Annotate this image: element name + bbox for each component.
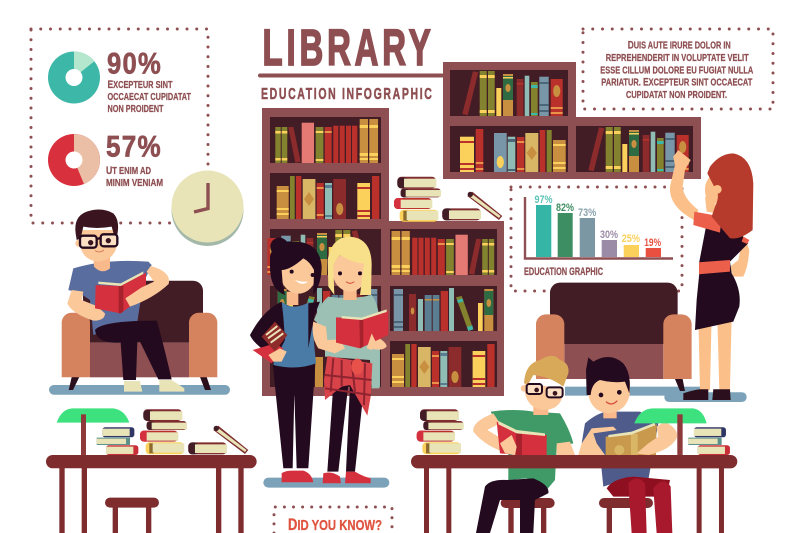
people: two boys reading at desk [411, 356, 737, 533]
stat: 57% text: MINIM VENIAM [106, 178, 163, 189]
dotted box: stats [31, 29, 208, 223]
woman with dark hair [250, 238, 322, 482]
person: woman with red hair reaching for book [664, 150, 753, 402]
book stacks: left desk [97, 409, 248, 455]
stat: 90% text: EXCEPTEUR SINT [108, 79, 172, 91]
dotted box: bar chart [511, 187, 682, 291]
donut chart: 90% [48, 52, 100, 104]
bar chart [524, 194, 673, 278]
bar chart: 19% [644, 237, 661, 249]
icon: desk lamp [634, 408, 707, 455]
woman with blonde hair [313, 237, 388, 483]
armchair: left [49, 281, 230, 395]
paragraph text: CUPIDATAT NON PROIDENT. [626, 90, 727, 101]
bar chart: 30% [600, 229, 618, 241]
stat: 57% text: UT ENIM AD [106, 165, 151, 177]
title: LIBRARY [262, 19, 434, 76]
boy with glasses [473, 356, 575, 533]
title underline [258, 74, 444, 78]
people: two women reading [250, 237, 389, 488]
person: man reading [67, 210, 184, 392]
books on top of bookcase [394, 177, 502, 222]
dotted box: paragraph [583, 29, 773, 109]
stat: 90% text: OCCAECAT CUPIDATAT [108, 92, 191, 103]
bar chart: EDUCATION GRAPHIC [524, 266, 603, 278]
dotted box: did you know [274, 507, 392, 533]
stat: 90% text: 90% [107, 48, 162, 80]
paragraph text: ESSE CILLUM DOLORE EU FUGIAT NULLA [600, 66, 753, 76]
bar chart: 73% [578, 207, 596, 219]
bar chart: 97% [534, 194, 553, 206]
boy with dark hair [578, 357, 677, 533]
desk: right [411, 455, 737, 533]
paragraph text: DUIS AUTE IRURE DOLOR IN [628, 40, 731, 52]
subtitle: EDUCATION INFOGRAPHIC [261, 86, 434, 103]
stat: 57% text: 57% [106, 130, 162, 164]
paragraph text: PARIATUR. EXCEPTEUR SINT OCCAECAT [601, 76, 752, 88]
book stacks: right desk [417, 409, 730, 455]
main bookcase [262, 108, 504, 396]
bar chart: 82% [556, 202, 574, 214]
stat: 90% text [107, 48, 191, 115]
paragraph text [600, 40, 753, 101]
icon: desk lamp [57, 408, 129, 455]
icon: wall clock [172, 170, 244, 246]
top right bookshelf [443, 62, 701, 179]
desk: left [46, 408, 257, 533]
donut chart: 57% [48, 134, 100, 186]
armchair: right [536, 283, 700, 396]
paragraph text: REPREHENDERIT IN VOLUPTATE VELIT [606, 53, 749, 64]
stat: 57% text [106, 130, 163, 189]
stat: 90% text: NON PROIDENT [108, 104, 164, 115]
bar chart: 25% [622, 233, 640, 245]
